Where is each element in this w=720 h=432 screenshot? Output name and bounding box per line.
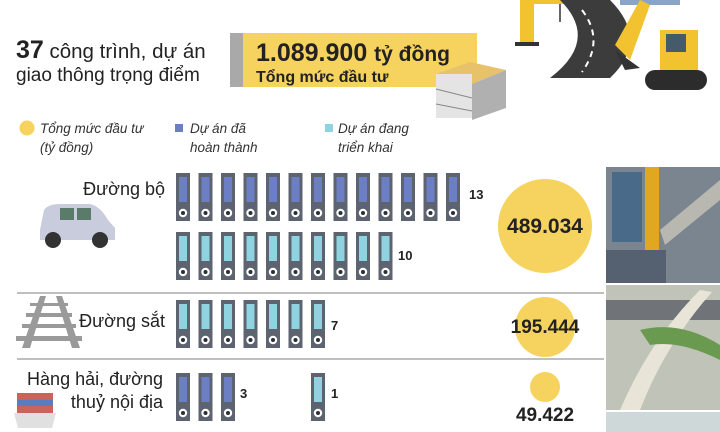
panel: rail: 195.444 [511, 317, 580, 338]
legend: Dự án đang [338, 121, 409, 136]
legend: hoàn thành [190, 140, 258, 155]
icon: car [40, 204, 115, 248]
panel: road [40, 173, 592, 280]
title: 37 công trình, dự án [16, 36, 206, 64]
panel: rail: Đường sắt [79, 310, 165, 331]
total investment box [230, 33, 477, 87]
panel: road: 10 [398, 248, 412, 263]
panel: road: 13 [469, 187, 483, 202]
legend: Dự án đã [190, 121, 246, 136]
panel: waterway: 49.422 [516, 405, 574, 426]
panel: waterway [14, 369, 574, 428]
legend: (tỷ đồng) [40, 140, 93, 155]
panel: waterway: 1 [331, 386, 338, 401]
total investment box: 1.089.900 tỷ đồng [256, 39, 450, 67]
panel: road: Đường bộ [83, 179, 165, 199]
photos [606, 167, 720, 432]
panel: waterway: thuỷ nội địa [71, 392, 164, 412]
panel: road: 489.034 [507, 215, 583, 238]
panel: rail [16, 296, 580, 357]
panel: waterway: Hàng hải, đường [27, 369, 163, 389]
title [16, 36, 206, 86]
legend [20, 120, 409, 155]
icon: railway [16, 296, 82, 348]
total investment box: Tổng mức đầu tư [256, 68, 389, 86]
illustration: construction [515, 0, 707, 90]
icon: ship [14, 393, 56, 428]
panel: waterway: 3 [240, 386, 247, 401]
legend: triển khai [338, 140, 394, 155]
icon: money stack [436, 62, 506, 120]
title: giao thông trọng điểm [16, 65, 200, 86]
legend: Tổng mức đầu tư [40, 121, 145, 136]
panel: rail: 7 [331, 318, 338, 333]
